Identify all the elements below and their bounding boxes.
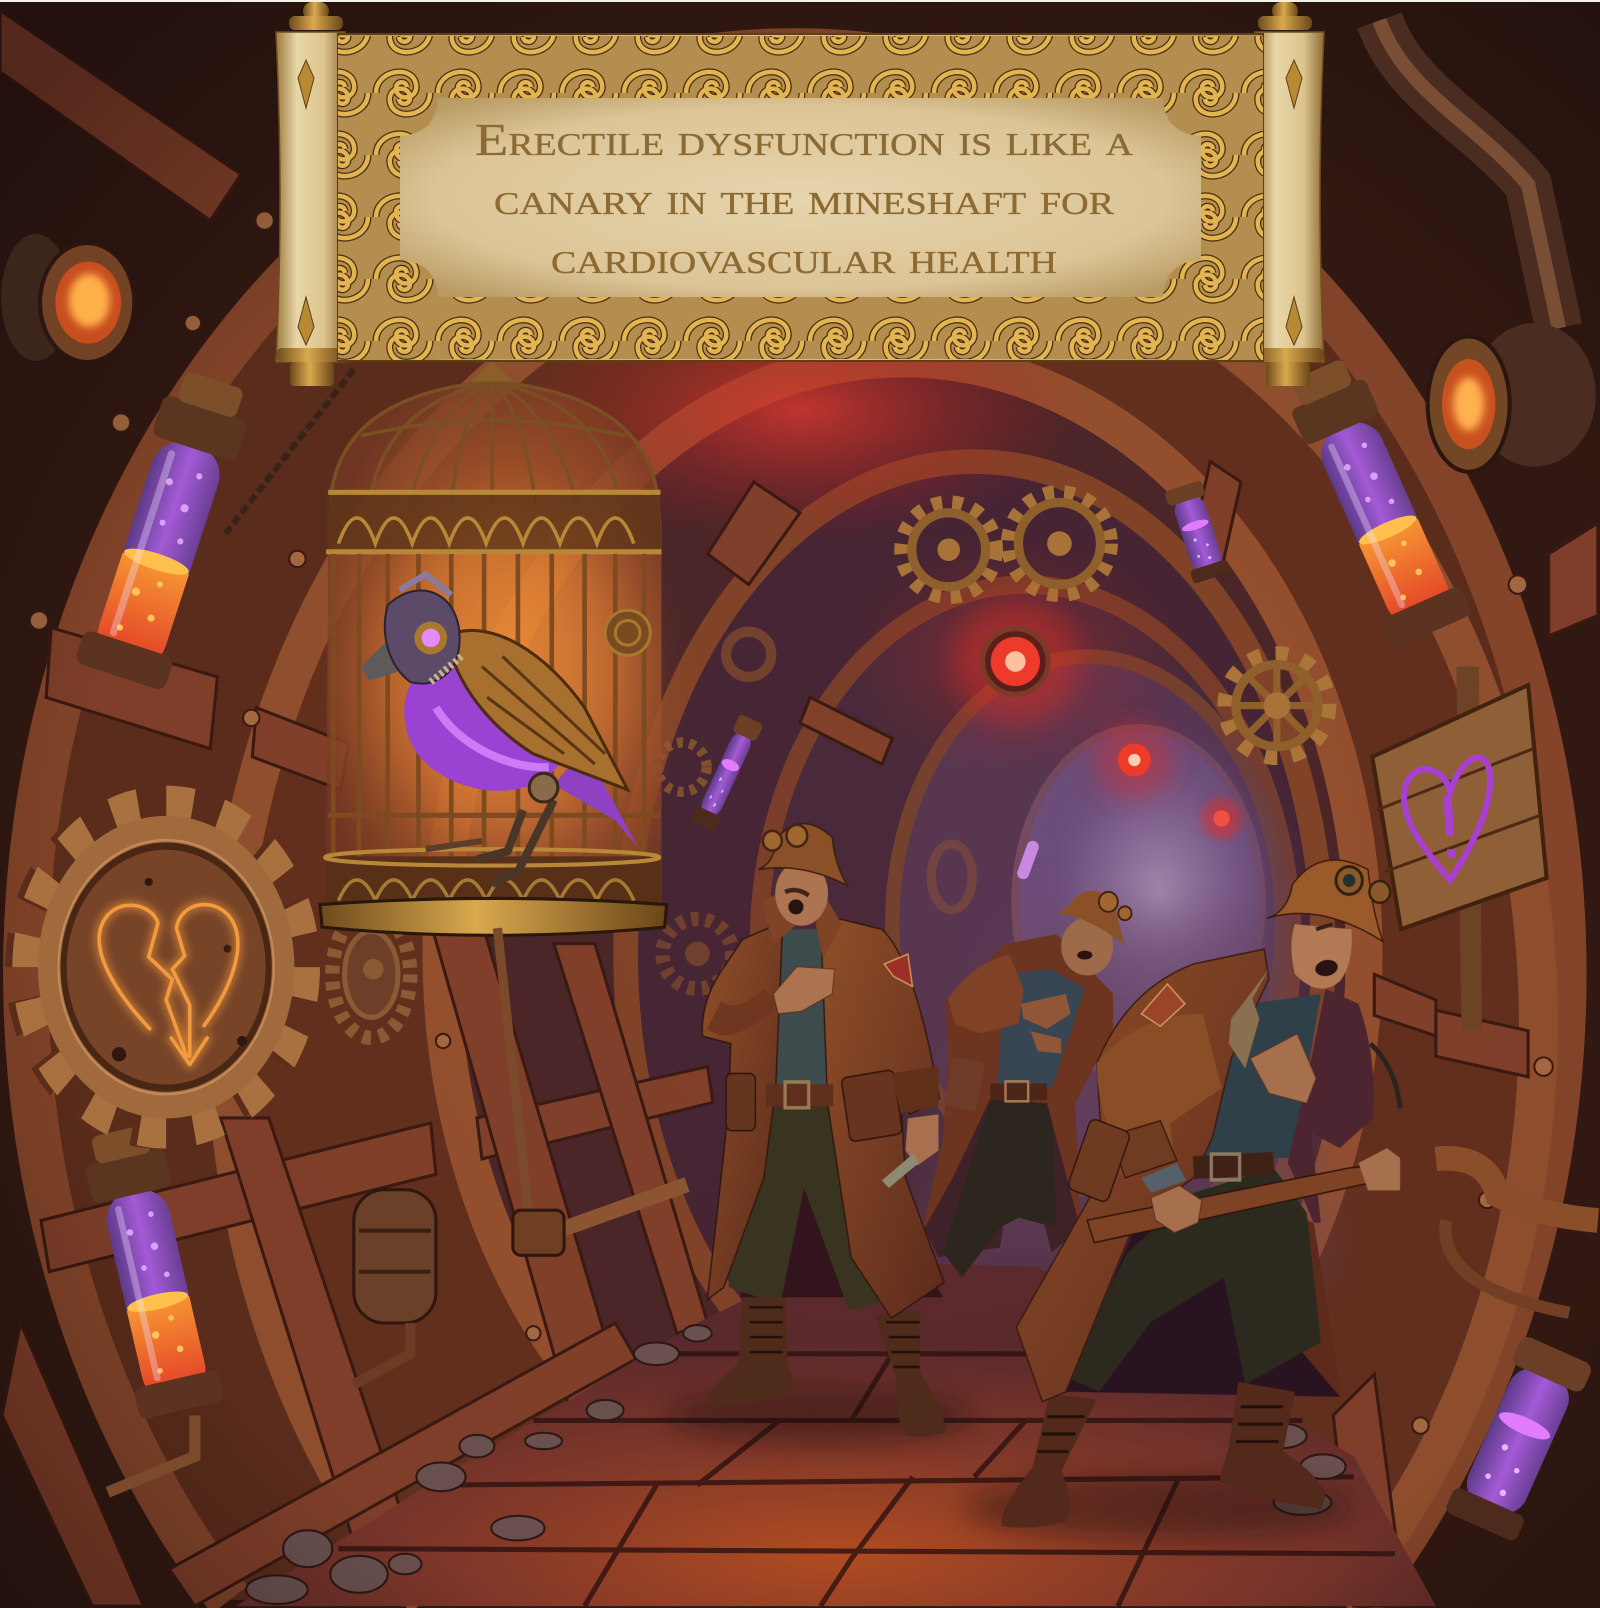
- gear icon: broken heart with downward arrow: [21, 804, 305, 1131]
- pendant on cage: [605, 610, 650, 655]
- rivets on the ribs: [30, 211, 1553, 1434]
- birdcage: [226, 361, 667, 935]
- distant gears: [332, 492, 1328, 1038]
- gear: ceiling left: [902, 503, 996, 597]
- wall lamp: upper right: [1379, 21, 1596, 472]
- scroll roller: left: [276, 2, 346, 386]
- gear: mid wall: [657, 632, 771, 792]
- purple heart with exclamation mark: [1404, 757, 1490, 880]
- title text: Erectile dysfunction is like a: [475, 114, 1133, 165]
- cage bars: [328, 554, 660, 856]
- miner: rear: [922, 891, 1132, 1277]
- red warning lights: [952, 598, 1242, 839]
- vial: lower left: [76, 1121, 225, 1420]
- vial: upper left: [74, 366, 260, 691]
- miner: left: [702, 824, 946, 1437]
- cage dome: [330, 382, 658, 503]
- gear: ceiling right: [1008, 492, 1111, 595]
- top edge line: [0, 0, 1600, 2]
- wall lamp: upper left: [1, 234, 134, 362]
- gear: right wall: [1226, 654, 1328, 757]
- cage interior glow: [326, 382, 662, 903]
- tunnel floor: [236, 1261, 1436, 1606]
- floor shadows beneath miners: [667, 1387, 1354, 1538]
- title text: canary in the mineshaft for: [494, 173, 1115, 224]
- miner: right with pickaxe: [1001, 860, 1400, 1528]
- rubble piles: [246, 1325, 1346, 1604]
- steam pipes and machinery, left wall: [108, 928, 1598, 1492]
- cage filigree band: [326, 490, 662, 552]
- ornamental gold border: [338, 36, 1263, 360]
- title scroll banner: [276, 2, 1324, 386]
- gear: far left of miners: [663, 919, 732, 989]
- parchment panel: [338, 34, 1263, 361]
- wooden sign: heart warning: [1372, 667, 1547, 1031]
- neon broken heart: [99, 905, 238, 1065]
- title text: [475, 114, 1133, 283]
- gear: distant: [931, 844, 972, 910]
- gear: beside cage: [332, 911, 410, 1038]
- vial: distant: [1016, 839, 1040, 881]
- title text: cardiovascular health: [551, 232, 1057, 283]
- scroll roller: right: [1254, 2, 1324, 386]
- vial: upper right: [1277, 352, 1473, 649]
- cage base: [320, 849, 667, 935]
- vial: small centre: [690, 714, 764, 832]
- hanging chain: [226, 369, 354, 533]
- vial: lower right: [1444, 1334, 1594, 1543]
- mechanical canary: [361, 574, 638, 884]
- parchment centre: [400, 98, 1201, 297]
- vial: tunnel ceiling: [1164, 480, 1231, 584]
